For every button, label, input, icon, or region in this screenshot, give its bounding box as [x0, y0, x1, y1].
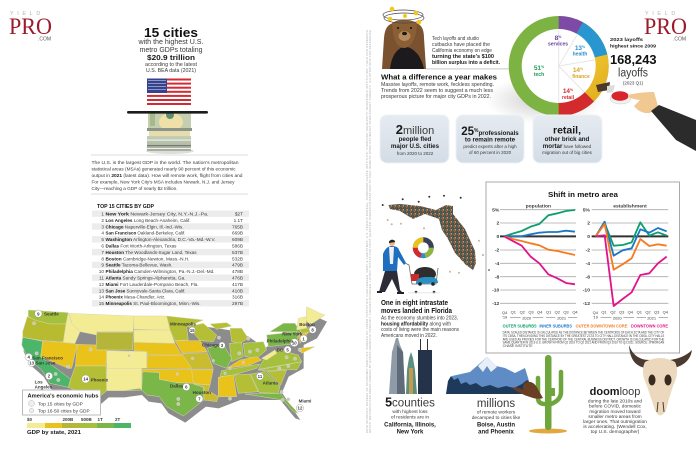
chart: population and establishment lines: -12 [492, 301, 500, 307]
chart: population and establishment lines: -8 [586, 274, 590, 280]
chart: population and establishment lines: Q4 [572, 309, 578, 314]
text block: doom loop: before COVID, domestic [589, 404, 642, 410]
map city labels: Boston [299, 322, 315, 327]
chart: population and establishment lines: 2021 [557, 315, 567, 320]
legend: GDP colour scale: $0 [27, 417, 33, 422]
map city labels: 6 [185, 385, 188, 390]
title block: 15 cities: 15 cities [144, 25, 198, 40]
map city labels: 10 [292, 340, 297, 345]
card: 25% professionals: to remain remote [465, 136, 516, 144]
text block: 5 counties: of residents are in [391, 414, 429, 420]
text block: doom loop: smaller metro areas from [588, 414, 642, 420]
chart: population and establishment lines: 2 [587, 221, 590, 227]
map extrusion [24, 313, 327, 423]
stat: 168,243 layoffs: 168,243 [610, 53, 657, 67]
card: retail: retail, [553, 124, 581, 136]
chart: population and establishment lines: 2021 [647, 315, 657, 320]
text block: Florida: Americans moved in 2022. [381, 333, 437, 339]
table: top 15 cities by GDP: 12 [99, 282, 104, 287]
chart: population and establishment lines: INNER SUBURBS [539, 323, 573, 329]
chart: population and establishment lines: Q2 [555, 309, 561, 314]
chart: population and establishment lines: 0 [497, 234, 500, 240]
illustration: mountains [446, 357, 533, 394]
table: top 15 cities by GDP: 6 [101, 244, 104, 248]
text block: Florida: One in eight intrastate [381, 300, 448, 307]
chart: layoffs by sector donut: % [570, 88, 574, 92]
chart: population and establishment lines: Q4 [593, 310, 599, 315]
chart: population and establishment lines: OUTER DOWNTOWN CORE [576, 323, 628, 329]
chart: population and establishment lines: -2 [495, 248, 500, 254]
text block: 5 counties: with highest loss [392, 409, 428, 415]
chart: layoffs by sector donut: tech [534, 72, 544, 78]
map city labels: Seattle [44, 312, 59, 317]
chart: layoffs by sector donut: 14 [573, 67, 580, 74]
map city labels: San Francisco [32, 355, 63, 360]
stat: 168,243 layoffs: highest since 2009 [610, 44, 656, 50]
map city labels: Los [35, 379, 43, 384]
chart: population and establishment lines: Q2 [520, 309, 526, 314]
heading: what a difference: What a difference a year makes [381, 72, 497, 82]
chart: layoffs by sector donut: 8 [555, 35, 558, 42]
title block: 15 cities: U.S. BEA data (2021) [146, 68, 196, 74]
map city labels: 13 [29, 361, 35, 366]
chart: population and establishment lines: '19 [593, 314, 599, 319]
table: top 15 cities by GDP: San Francisco Oakland-Berkeley, Calif. [106, 231, 186, 236]
stat: 168,243 layoffs: layoffs [618, 68, 648, 80]
card: 25% professionals [456, 115, 524, 163]
logo: Yield Pro right: YIELD [645, 11, 679, 17]
chart: layoffs by sector donut: finance [572, 74, 590, 80]
chart: population and establishment lines: DATA: SCALED DISTANCE IS CALCULATED AS THE DISTANCE BETWEEN THE CENTROIDS OF EACH ZCTA AND THE CITY OF [503, 331, 664, 335]
chart: population and establishment lines: establishment [613, 203, 647, 209]
chart: layoffs by sector donut: % [580, 67, 584, 71]
map states [22, 307, 325, 416]
chart: population and establishment lines: -4 [586, 261, 590, 267]
text block: Florida [381, 300, 459, 339]
map city labels: Minneapolis [170, 322, 196, 327]
table: top 15 cities by GDP: 316B [232, 295, 243, 300]
text block: Florida: costs of living were the main reasons [381, 327, 459, 333]
chart: population and establishment lines: -2 [586, 248, 590, 254]
chart: population and establishment lines: ITS CBSA, THEN DIVIDING THIS DISTANCE BY THE GREATEST ZCTA TO CITY HALL DISTANCE IN THE CBSA. CITY HALLS [503, 334, 664, 338]
card: retail: migration out of big cities [542, 150, 593, 155]
card: retail: other brick and [545, 136, 590, 143]
table: top 15 cities by GDP: 7 [101, 250, 104, 255]
map city labels: 14 [83, 377, 89, 382]
table: top 15 cities by GDP: 2 [101, 218, 104, 223]
chart: layoffs by sector donut: % [582, 45, 586, 49]
map city labels: Houston [193, 390, 211, 395]
table: top 15 cities by GDP: Houston The Woodlands-Sugar Land, Texas [106, 250, 197, 255]
card: 2 million: people fled [399, 136, 432, 143]
table: top 15 cities by GDP: 14 [99, 295, 104, 300]
stat: 168,243 layoffs [610, 37, 657, 86]
text block: millions: and Phoenix [478, 430, 514, 436]
chart: population and establishment lines: Q3 [563, 309, 569, 314]
chart: population and establishment lines: -10 [492, 288, 500, 294]
chart: population and establishment lines: 2020 [613, 315, 623, 320]
chart: population and establishment lines: Q3 [619, 309, 625, 314]
text block: intro paragraph: statistical areas (MSAs) generated nearly 90 percent of this economic [92, 166, 236, 172]
panel: shift in metro area charts: Shift in metro area [548, 190, 619, 199]
chart: layoffs by sector donut: services [548, 42, 568, 48]
illustration: hand pressing button [596, 82, 696, 151]
chart: layoffs by sector donut: 51 [534, 65, 541, 72]
chart: population and establishment lines: Q2 [645, 309, 651, 314]
map city labels: 2 [48, 374, 51, 379]
table: top 15 cities by GDP: 13 [99, 288, 104, 293]
card: 2 million: 2million [396, 122, 434, 137]
map city labels: Chicago [202, 342, 220, 347]
legend: GDP colour scale: 1T [98, 417, 103, 422]
table: top 15 cities by GDP: 5 [101, 237, 104, 242]
text block: millions [472, 398, 521, 436]
card: 2 million [380, 115, 449, 163]
map city labels: 8 [311, 327, 314, 332]
map city labels: 4 [27, 355, 30, 360]
chart: population and establishment lines: Q3 [528, 309, 534, 314]
text block: doom loop [583, 386, 647, 435]
legend: America's economic hubs: Top 16-50 cities by GDP [38, 408, 90, 414]
panel: shift in metro area charts [486, 182, 680, 353]
text block: doom loop: migration moved toward [589, 409, 641, 415]
table: top 15 cities by GDP: 765B [232, 224, 243, 229]
chart: layoffs by sector donut: health [573, 52, 587, 58]
table: top 15 cities by GDP: Boston Cambridge-Newton, Mass.-N.H. [106, 256, 190, 261]
chart: population and establishment lines: Q4 [663, 309, 669, 314]
chart: population and establishment lines: Q4 [537, 309, 543, 314]
chart: population and establishment lines: -12 [583, 301, 590, 307]
title block: 15 cities: according to the latest [145, 62, 198, 68]
table: top 15 cities by GDP: 537B [232, 250, 243, 255]
table: top 15 cities by GDP: 9 [101, 263, 104, 268]
map city labels: Miami [299, 398, 311, 403]
title block: 15 cities: with the highest U.S. [137, 39, 204, 46]
chart: population and establishment lines: OUTER SUBURBS [503, 323, 537, 329]
chart: layoffs by sector donut: 14 [563, 88, 570, 95]
text block: tech layoffs: California economy on edge [432, 48, 492, 54]
chart: population and establishment lines: 5% [492, 207, 500, 213]
chart: population and establishment lines: Q4 [502, 310, 508, 315]
table: top 15 cities by GDP: Washington Arlington-Alexandria, D.C.-Va.-Md.-W.V. [106, 237, 216, 242]
chart: layoffs by sector donut: % [558, 35, 562, 39]
table: top 15 cities by GDP: 1.1T [234, 218, 243, 223]
legend: GDP colour scale: 2T [115, 417, 121, 422]
map city labels: Phoenix [91, 377, 109, 382]
legend: GDP colour scale: GDP by state, 2021 [27, 430, 81, 436]
table: top 15 cities by GDP: 479B [232, 263, 243, 268]
table: top 15 cities by GDP: 3 [101, 224, 104, 229]
table: top 15 cities by GDP: New York Newark-Jersey City, N.Y.-N.J.-Pa. [106, 212, 208, 216]
text block: intro paragraph: output in 2021 (latest data). How will remote work, flight from cities and [92, 173, 243, 179]
table: top 15 cities by GDP: Phoenix Mesa-Chandler, Ariz. [106, 295, 166, 300]
vertical credit text [365, 30, 372, 433]
chart: population and establishment lines: Q4 [628, 309, 634, 314]
table: top 15 cities by GDP: 586B [232, 244, 243, 248]
text block: intro paragraph: The U.S. is the largest GDP in the world. The nation's metropolitan [92, 160, 239, 166]
text block: intro paragraph: For example, New York City's MSA includes Newark, N.J. and Jersey [92, 180, 235, 186]
chart: population and establishment lines [492, 203, 669, 348]
table: top 15 cities by GDP: Los Angeles Long Beach-Anaheim, Calif. [106, 218, 190, 223]
card: retail [533, 115, 602, 163]
map city labels: 7 [198, 396, 201, 401]
map city labels [25, 310, 316, 412]
illustration: small donut [415, 240, 431, 256]
text block: doom loop: during the late 2010s and [588, 398, 642, 404]
legend: America's economic hubs: America's economic hubs [28, 394, 99, 400]
illustration: skyscrapers [389, 338, 432, 394]
heading: what a difference [381, 68, 511, 100]
illustration: man pushing cart [377, 240, 440, 294]
stat: 168,243 layoffs: (2023 Q1) [623, 80, 644, 86]
logo: Yield Pro right: .COM [673, 36, 686, 42]
map city labels: Dallas [170, 384, 184, 389]
title block: 15 cities [137, 25, 204, 74]
chart: population and establishment lines: CHASE INSTITUTE [503, 344, 533, 348]
text block: Florida: As the economy stumbles into 2023, [381, 316, 458, 322]
chart: population and establishment lines: 2 [497, 221, 500, 227]
table: top 15 cities by GDP: TOP 15 CITIES BY GDP [97, 204, 155, 210]
table: top 15 cities by GDP: Philadelphia Camden-Wilmington, Pa.-N.J.-Del.-Md. [106, 269, 214, 274]
map city labels: DC [277, 347, 284, 352]
text block: 5 counties: 5counties [385, 396, 435, 410]
icon: American flag [147, 78, 191, 105]
chart: population and establishment lines: DOWNTOWN CORE [631, 323, 669, 329]
map city labels: 3 [221, 343, 224, 348]
table: top 15 cities by GDP: Atlanta Sandy Springs-Alpharetta, Ga. [106, 276, 186, 280]
map city dots [32, 322, 302, 406]
chart: layoffs by sector donut: retail [562, 95, 575, 101]
text block: millions: decamped to cities like [472, 415, 521, 421]
table: top 15 cities by GDP: San Jose Sunnyvale-Santa Clara, Calif. [106, 288, 186, 293]
map city labels: Philadelphia [267, 339, 294, 344]
chart: population and establishment lines: 0 [587, 234, 590, 240]
chart: population and establishment lines: '19 [502, 314, 508, 319]
table: top 15 cities by GDP: 478B [232, 269, 243, 274]
text block: tech layoffs: Tech layoffs and studio [432, 36, 479, 42]
chart: population and establishment lines: ARE USED AS PROXIES FOR THE CENTROID OF THE CENTRAL BUSINESS DISTRICT. GROWTH IS CALCULATED FOR THE [503, 337, 664, 341]
text block: tech layoffs [432, 36, 501, 66]
illustration: bear with dizzy stars [382, 7, 426, 69]
chart: population and establishment lines: Q1 [546, 309, 552, 314]
chart: population and establishment lines: SAME QUARTER IN 2019 U.S. GROWTH FROM Q2 2019 TO Q2 2021 AND FROM Q3 2019 TO Q3 2021. SOURCE: JPMORGAN [503, 341, 665, 345]
map city labels: 9 [37, 311, 40, 316]
vertical credit text: NOTES: METROPOLITAN AREAS RANKED BY GROSS DOMESTIC PRODUCT; FIGURES ROUNDED; LAYOFF TOTALS FOR FIRST QUARTER; MIGRATION DATA 2020 TO 2022; REMOTE WORK ESTIMATES FROM EXPERT SURVEYS; ILLUSTRATIONS FOR REFERENCE [368, 30, 372, 433]
card: retail: mortar have followed [543, 143, 592, 150]
map city labels: Atlanta [263, 381, 278, 386]
chart: layoffs by sector donut: % [541, 65, 545, 69]
table: top 15 cities by GDP: 4 [101, 231, 104, 236]
logo: Yield Pro left: YIELD [10, 11, 44, 17]
title block: 15 cities: $20.9 trillion [147, 53, 195, 62]
map city labels: New York [282, 332, 303, 337]
text block: millions: millions [477, 398, 515, 410]
logo: Yield Pro left: .COM [38, 36, 51, 42]
card: 25% professionals: predict experts after a high [463, 144, 517, 149]
table: top 15 cities by GDP: 410B [232, 288, 243, 293]
table: top 15 cities by GDP [92, 204, 249, 306]
text block: intro paragraph: City—reaching a GDP of nearly $2 trillion. [92, 186, 178, 192]
table: top 15 cities by GDP: 532B [232, 256, 243, 261]
text block: millions: Boise, Austin [477, 422, 515, 428]
chart: population and establishment lines: Q1 [601, 309, 607, 314]
map city labels: 5 [286, 347, 289, 352]
text block: Florida: housing affordability along with [381, 322, 451, 328]
title block: 15 cities: metro GDPs totaling [140, 47, 203, 54]
table: top 15 cities by GDP: 8 [101, 256, 104, 261]
text block: tech layoffs: billion surplus into a deficit. [432, 60, 501, 66]
card: 25% professionals: of 60 percent in 2020 [469, 150, 512, 155]
legend: GDP colour scale: 500B [81, 417, 93, 422]
chart: population and establishment lines: 2020 [522, 315, 532, 320]
stat: 168,243 layoffs: 2023 layoffs [610, 37, 643, 43]
vertical credit text: DATA SOURCES: BUREAU OF ECONOMIC ANALYSIS; BUREAU OF LABOR STATISTICS; CHALLENGER, GRAY & CHRISTMAS; U.S. CENSUS BUREAU; JPMORGAN CHASE INSTITUTE; STANFORD UNIVERSITY; BROOKINGS INSTITUTION; YIELD PRO RESEARCH [365, 30, 369, 433]
map city labels: 1 [302, 336, 305, 341]
text block: Florida: moves landed in Florida [381, 308, 452, 315]
chart: population and establishment lines: Q1 [637, 309, 643, 314]
table: top 15 cities by GDP: 669B [232, 231, 243, 236]
map city labels: 12 [298, 406, 303, 411]
small chart-side marks [482, 254, 490, 271]
table: top 15 cities by GDP: 15 [99, 301, 104, 306]
table: top 15 cities by GDP: Miami Fort Lauderdale-Pompano Beach, Fla. [106, 282, 198, 287]
text block: millions: of remote workers [477, 410, 516, 416]
table: top 15 cities by GDP: Minneapolis St. Paul-Bloomington, Minn.-Wis. [106, 301, 200, 306]
map city labels: 15 [190, 328, 195, 333]
legend: America's economic hubs: Top 15 cities by GDP [38, 401, 83, 407]
chart: population and establishment lines: Q2 [610, 309, 616, 314]
chart: population and establishment lines: Q1 [511, 309, 517, 314]
table: top 15 cities by GDP: $2T [235, 212, 243, 216]
map: GDP by state [22, 307, 327, 423]
table: top 15 cities by GDP: 417B [232, 282, 243, 287]
chart: population and establishment lines: -10 [583, 288, 590, 294]
legend: GDP colour scale: 200B [62, 417, 74, 422]
legend: America's economic hubs [22, 390, 100, 415]
logo: Yield Pro right: PRO [644, 14, 687, 39]
table: top 15 cities by GDP: 297B [232, 301, 243, 306]
illustration: Florida crowd map [382, 195, 480, 274]
card: 2 million: major U.S. cities [391, 143, 440, 150]
chart: layoffs by sector donut [485, 16, 609, 124]
chart: population and establishment lines: -8 [495, 274, 500, 280]
illustration: bull skull [629, 345, 692, 416]
legend: GDP colour scale [27, 417, 131, 436]
illustration: cactus and hat [512, 355, 567, 434]
table: top 15 cities by GDP: Dallas Fort Worth-Arlington, Texas [106, 244, 177, 248]
logo: Yield Pro left: PRO [9, 14, 52, 39]
text block: doom loop: larger ones. That outmigration [583, 419, 647, 425]
map city labels: 11 [258, 374, 263, 379]
table: top 15 cities by GDP: 11 [99, 276, 104, 280]
heading: what a difference: Trends from 2022 seem to suggest a much less [381, 88, 493, 94]
heading: what a difference: prosperous picture for major city GDPs in 2022. [381, 94, 491, 100]
text block: 5 counties: New York [397, 430, 424, 436]
chart: population and establishment lines: Q3 [654, 309, 660, 314]
chart: population and establishment lines: population [526, 203, 551, 209]
icon: money slot with bills [127, 111, 208, 154]
text block: tech layoffs: cutbacks have placed the [432, 42, 490, 48]
table: top 15 cities by GDP: 10 [99, 269, 104, 274]
text block: intro paragraph [91, 154, 248, 194]
map city labels: San Jose [36, 360, 56, 365]
card: 25% professionals: % [474, 128, 479, 134]
map city labels: Angeles [35, 385, 53, 390]
text block: doom loop: top U.S. demographer) [591, 429, 640, 435]
heading: what a difference: Massive layoffs, remote work, feckless spending. [381, 82, 494, 88]
table: top 15 cities by GDP: 1 [101, 212, 104, 216]
chart: layoffs by sector donut: 13 [575, 45, 582, 52]
text block: 5 counties [384, 396, 436, 436]
text block: 5 counties: California, Illinois, [384, 422, 436, 428]
table: top 15 cities by GDP: 609B [232, 237, 243, 242]
text block: tech layoffs: turning the state's $100 [432, 54, 494, 60]
text block: doom loop: doomloop [590, 386, 640, 398]
text block: doom loop: is accelerating. (Wendell Cox, [583, 424, 647, 430]
table: top 15 cities by GDP: Seattle Tacoma-Bellevue, Wash. [106, 263, 172, 268]
chart: population and establishment lines: 5% [583, 207, 591, 213]
card: 25% professionals: professionals [479, 130, 519, 137]
table: top 15 cities by GDP: Chicago Naperville-Elgin, Ill.-Ind.-Wis. [106, 224, 184, 229]
table: top 15 cities by GDP: 476B [232, 276, 243, 280]
card: 2 million: from 2020 to 2022 [397, 151, 434, 156]
card: 25% professionals: 25 [461, 126, 475, 138]
chart: population and establishment lines: -4 [495, 261, 500, 267]
